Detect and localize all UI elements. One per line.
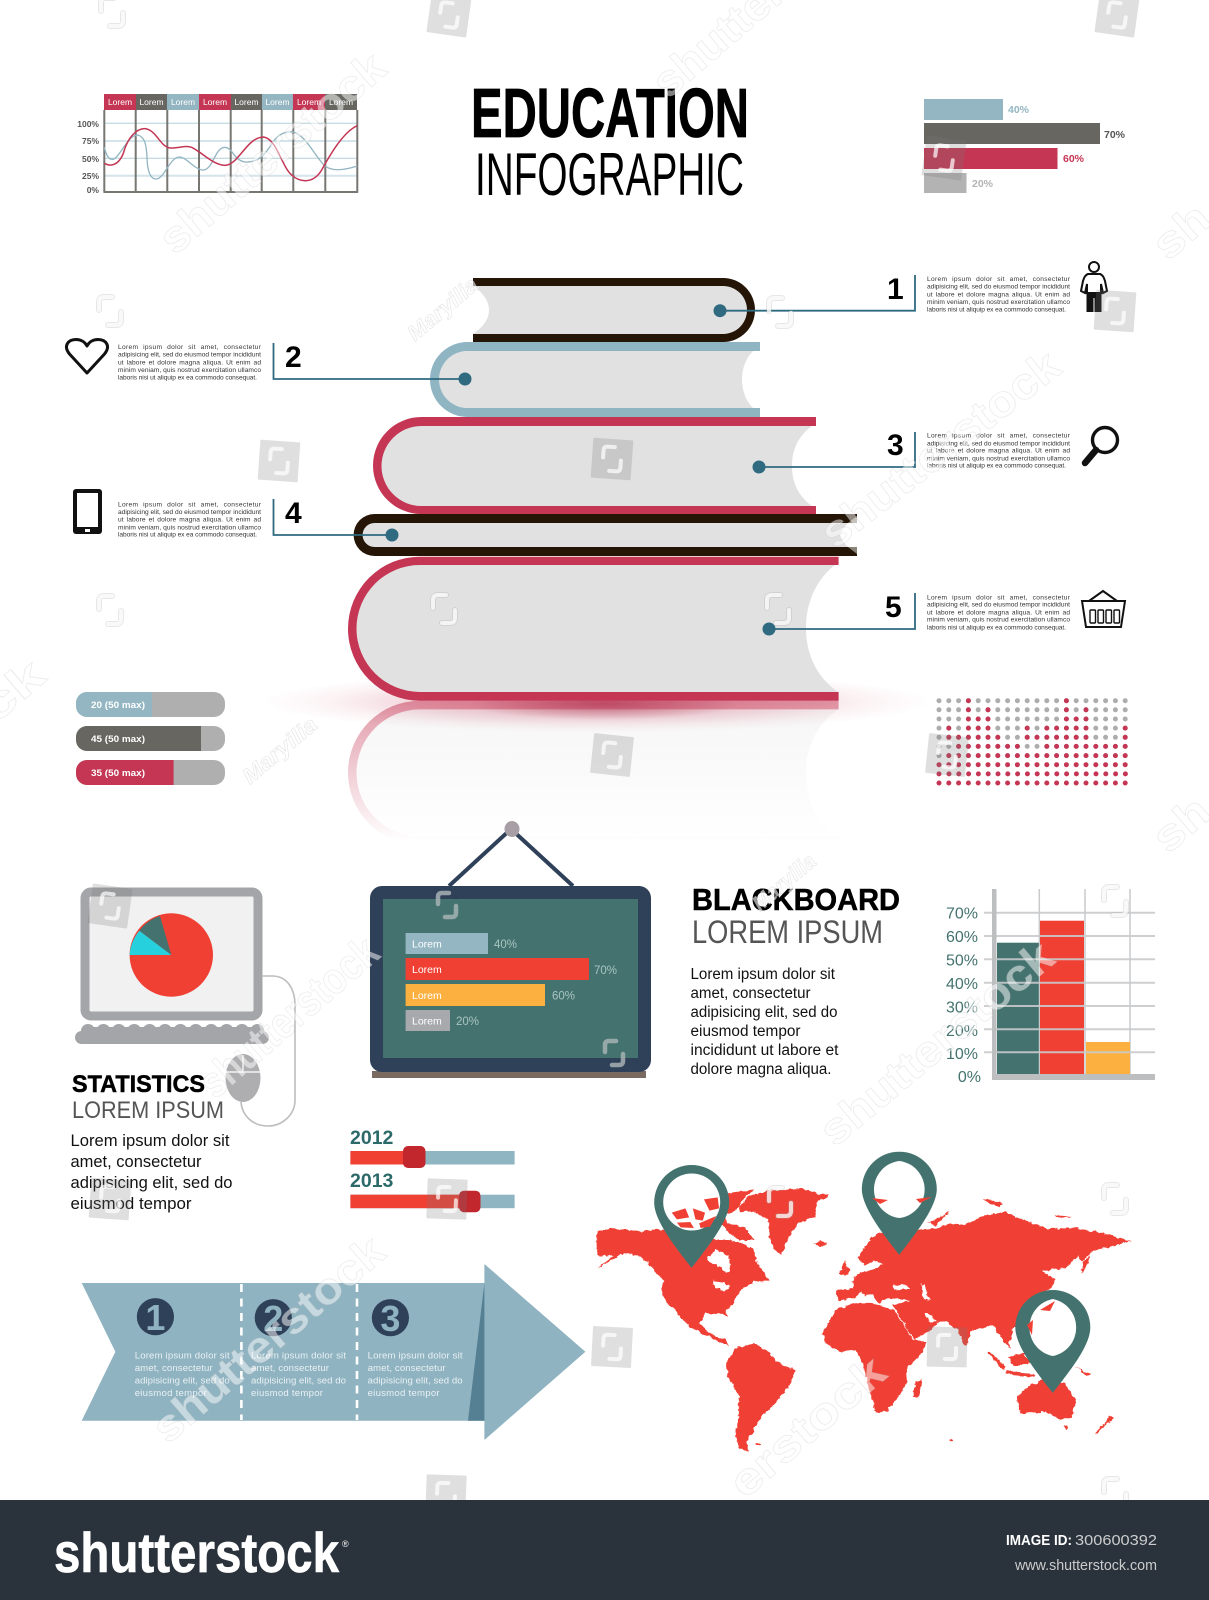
board frame	[370, 886, 651, 1072]
statistics text: Lorem ipsum dolor sit	[70, 1132, 230, 1150]
dot matrix chart	[939, 701, 1127, 783]
callout 5: 5	[885, 591, 902, 624]
watermark text: erstock	[720, 1346, 896, 1508]
progress pills	[76, 692, 225, 785]
footer image id: www.shutterstock.com	[1014, 1557, 1157, 1574]
chart axis labels	[77, 119, 99, 195]
text block 3: ut labore et dolore magna aliqua. Ut enim ad	[927, 448, 1070, 455]
top right bar chart: 60%	[1063, 153, 1085, 165]
watermark text: shutterstock	[143, 1226, 395, 1453]
chart header cells: Lorem	[171, 97, 195, 107]
chart header cells: Lorem	[265, 97, 290, 107]
map pin 3	[1015, 1290, 1090, 1393]
book 3 red	[373, 417, 816, 514]
board bars: 70%	[594, 965, 617, 977]
statistics text: STATISTICS	[72, 1071, 205, 1098]
column chart: 40%	[946, 976, 978, 993]
text block 5: Lorem ipsum dolor sit amet, consectetur	[927, 594, 1071, 601]
watermark text: shutterstock	[810, 931, 1064, 1156]
text block 4: minim veniam, quis nostrud exercitation ullamco	[118, 524, 261, 531]
top right bar chart	[924, 99, 1126, 193]
text block 2: adipisicing elit, sed do eiusmod tempor incididunt	[118, 352, 261, 359]
step 1: Lorem ipsum dolor sit	[135, 1350, 230, 1362]
statistics text	[70, 1071, 233, 1213]
statistics text: amet, consectetur	[70, 1153, 202, 1171]
text block 2: minim veniam, quis nostrud exercitation ullamco	[118, 367, 261, 374]
year sliders: 2013	[350, 1170, 394, 1192]
map water holes	[708, 1250, 937, 1322]
arctic canada	[719, 1189, 755, 1240]
step 3: Lorem ipsum dolor sit	[368, 1350, 463, 1362]
map pin 1	[654, 1165, 729, 1268]
step 3: adipisicing elit, sed do	[368, 1376, 463, 1386]
text block 2: ut labore et dolore magna aliqua. Ut enim ad	[118, 359, 261, 366]
callout 4	[118, 497, 398, 542]
title: EDUCATION	[471, 74, 749, 152]
column chart: 10%	[946, 1046, 978, 1063]
text block 5	[927, 594, 1071, 631]
column chart: 0%	[958, 1069, 981, 1086]
cable	[241, 976, 295, 1126]
column chart: 60%	[946, 929, 978, 946]
blackboard text: adipisicing elit, sed do	[690, 1004, 838, 1021]
chart axis labels: 25%	[82, 171, 99, 181]
madagascar	[913, 1378, 922, 1397]
laptop screen	[85, 892, 258, 1016]
book 2 blue	[430, 342, 760, 417]
board bars: 60%	[552, 990, 575, 1002]
chart header cells: Lorem	[139, 97, 164, 107]
watermark author: Maryilia	[402, 272, 483, 346]
board bars: Lorem	[412, 938, 442, 950]
step 2: 2	[263, 1298, 283, 1339]
chart axis labels: 100%	[77, 119, 99, 129]
arctic islands in pin	[672, 1197, 719, 1228]
arrow fold	[468, 1283, 484, 1421]
chart header cells: Lorem	[297, 97, 321, 107]
board bars: 40%	[494, 939, 517, 951]
footer image id	[1006, 1532, 1157, 1574]
step 3: 3	[380, 1298, 400, 1339]
blackboard text: eiusmod tempor	[690, 1023, 800, 1040]
text block 5: adipisicing elit, sed do eiusmod tempor incididunt	[927, 602, 1070, 609]
step 1: eiusmod tempor	[135, 1388, 207, 1399]
title	[471, 74, 749, 208]
step 2: eiusmod tempor	[251, 1388, 324, 1399]
pie chart	[130, 913, 213, 997]
step 3: amet, consectetur	[368, 1363, 446, 1374]
text block 3: laboris nisi ut aliquip ex ea commodo consequat.	[927, 463, 1066, 470]
text block 5: ut labore et dolore magna aliqua. Ut enim ad	[927, 609, 1070, 616]
footer image id: 300600392	[1075, 1532, 1157, 1549]
greenland	[739, 1188, 830, 1255]
step 2: amet, consectetur	[251, 1363, 330, 1374]
icon: basket	[1082, 591, 1125, 627]
watermark author: Maryilia	[747, 848, 821, 916]
step 3: eiusmod tempor	[368, 1388, 440, 1399]
blackboard text: LOREM IPSUM	[692, 914, 883, 950]
text block 1: ut labore et dolore magna aliqua. Ut enim ad	[927, 291, 1070, 298]
laptop with pie chart	[75, 892, 295, 1126]
column chart: 30%	[946, 1000, 978, 1016]
column chart: 70%	[946, 906, 978, 922]
statistics text: adipisicing elit, sed do	[70, 1174, 233, 1192]
text block 3: Lorem ipsum dolor sit amet, consectetur	[927, 433, 1071, 440]
text block 4: Lorem ipsum dolor sit amet, consectetur	[118, 501, 262, 508]
text block 1	[927, 276, 1071, 313]
chart axis labels: 0%	[87, 185, 99, 195]
progress pills: 45 (50 max)	[91, 734, 145, 744]
step 3	[368, 1298, 463, 1399]
chart curves	[104, 126, 357, 181]
progress pills: 20 (50 max)	[91, 700, 145, 710]
text block 4: laboris nisi ut aliquip ex ea commodo consequat.	[118, 532, 257, 539]
chart header cells: Lorem	[329, 97, 353, 107]
footer logo: ®	[342, 1539, 349, 1549]
line chart	[77, 94, 358, 195]
callout 2: 2	[285, 341, 302, 374]
watermark author	[237, 272, 821, 916]
text block 2	[118, 344, 262, 381]
footer logo: shutterstock	[54, 1521, 340, 1584]
statistics text: LOREM IPSUM	[72, 1097, 224, 1124]
chart header cells: Lorem	[203, 97, 227, 107]
south america	[726, 1343, 795, 1452]
footer image id: IMAGE ID:	[1006, 1532, 1072, 1549]
chart header cells	[104, 94, 357, 110]
text block 5: minim veniam, quis nostrud exercitation ullamco	[927, 617, 1070, 624]
arrow panel	[82, 1264, 585, 1440]
icon: phone	[73, 489, 102, 534]
callout 2	[118, 341, 472, 386]
text block 4: ut labore et dolore magna aliqua. Ut enim ad	[118, 517, 261, 524]
text block 1: minim veniam, quis nostrud exercitation ullamco	[927, 299, 1070, 306]
board bars: 20%	[456, 1016, 479, 1028]
blackboard text: Lorem ipsum dolor sit	[690, 966, 836, 983]
blackboard text: BLACKBOARD	[692, 883, 900, 917]
world map	[597, 1188, 1131, 1452]
text block 2: Lorem ipsum dolor sit amet, consectetur	[118, 344, 262, 351]
chart header cells: Lorem	[234, 97, 259, 107]
watermark author: Maryilia	[237, 712, 322, 789]
column chart: 50%	[946, 952, 978, 970]
africa	[822, 1303, 928, 1413]
watermark text: shutterstock	[150, 42, 396, 264]
blackboard	[370, 821, 651, 1078]
blackboard text	[690, 883, 900, 1078]
icon: heart	[67, 340, 107, 373]
map pin 2	[862, 1152, 937, 1255]
book 5 red large	[348, 557, 839, 701]
callout 3	[752, 429, 1071, 474]
keyboard	[75, 1027, 269, 1044]
watermark text: shutterstock	[811, 340, 1070, 558]
north america	[597, 1228, 769, 1347]
board bars	[406, 933, 617, 1031]
board bars: Lorem	[412, 1016, 442, 1028]
text block 2: laboris nisi ut aliquip ex ea commodo consequat.	[118, 374, 257, 381]
chart axis labels: 75%	[82, 136, 99, 146]
text block 3	[927, 433, 1071, 470]
footer bar	[0, 1500, 1209, 1600]
chart header cells: Lorem	[108, 97, 132, 107]
board bars: Lorem	[412, 964, 442, 976]
progress pills: 35 (50 max)	[91, 768, 145, 778]
step 1	[135, 1297, 230, 1399]
iceland	[813, 1241, 827, 1247]
mouse	[226, 1054, 260, 1102]
column chart: 20%	[946, 1023, 978, 1040]
callout 3: 3	[887, 429, 904, 462]
shelf	[372, 1071, 646, 1078]
book 4 dark thin	[354, 514, 857, 556]
text block 3: minim veniam, quis nostrud exercitation ullamco	[927, 456, 1070, 462]
icon: magnifier	[1085, 428, 1118, 463]
step 2	[251, 1298, 346, 1399]
islands	[756, 1198, 1115, 1446]
top right bar chart: 40%	[1008, 104, 1030, 116]
icon: person	[1081, 262, 1107, 311]
board bars: Lorem	[412, 990, 442, 1002]
book 1 dark	[473, 278, 755, 342]
column chart	[946, 889, 1155, 1086]
blackboard text: dolore magna aliqua.	[690, 1061, 832, 1078]
blackboard text: amet, consectetur	[690, 985, 810, 1002]
text block 3: adipisicing elit, sed do eiusmod tempor incididunt	[927, 440, 1070, 447]
callout 1: 1	[887, 273, 904, 306]
text block 4	[118, 501, 262, 539]
text block 1: Lorem ipsum dolor sit amet, consectetur	[927, 276, 1071, 283]
step 1: amet, consectetur	[135, 1363, 213, 1374]
strings	[449, 829, 573, 886]
top right bar chart: 20%	[972, 178, 994, 190]
callout 4: 4	[285, 497, 302, 530]
callout 5	[762, 591, 1071, 636]
chart axis labels: 50%	[82, 154, 99, 164]
step 2: adipisicing elit, sed do	[251, 1376, 346, 1386]
statistics text: eiusmod tempor	[70, 1195, 192, 1213]
year sliders: 2012	[350, 1127, 394, 1149]
text block 4: adipisicing elit, sed do eiusmod tempor incididunt	[118, 509, 261, 516]
callout 1	[714, 273, 1071, 317]
step 1: adipisicing elit, sed do	[135, 1376, 230, 1386]
text block 1: adipisicing elit, sed do eiusmod tempor incididunt	[927, 284, 1070, 291]
text block 5: laboris nisi ut aliquip ex ea commodo consequat.	[927, 624, 1066, 631]
text block 1: laboris nisi ut aliquip ex ea commodo consequat.	[927, 306, 1066, 313]
watermark text: shutterstock	[190, 927, 389, 1108]
nail	[504, 821, 520, 837]
book stack shadow and reflection	[262, 672, 932, 845]
top right bar chart: 70%	[1104, 129, 1126, 141]
year sliders	[350, 1127, 515, 1212]
title: INFOGRAPHIC	[475, 141, 744, 208]
step 1: 1	[145, 1297, 165, 1338]
blackboard text: incididunt ut labore et	[690, 1042, 839, 1059]
step 2: Lorem ipsum dolor sit	[251, 1350, 346, 1362]
eurasia	[835, 1212, 1131, 1350]
